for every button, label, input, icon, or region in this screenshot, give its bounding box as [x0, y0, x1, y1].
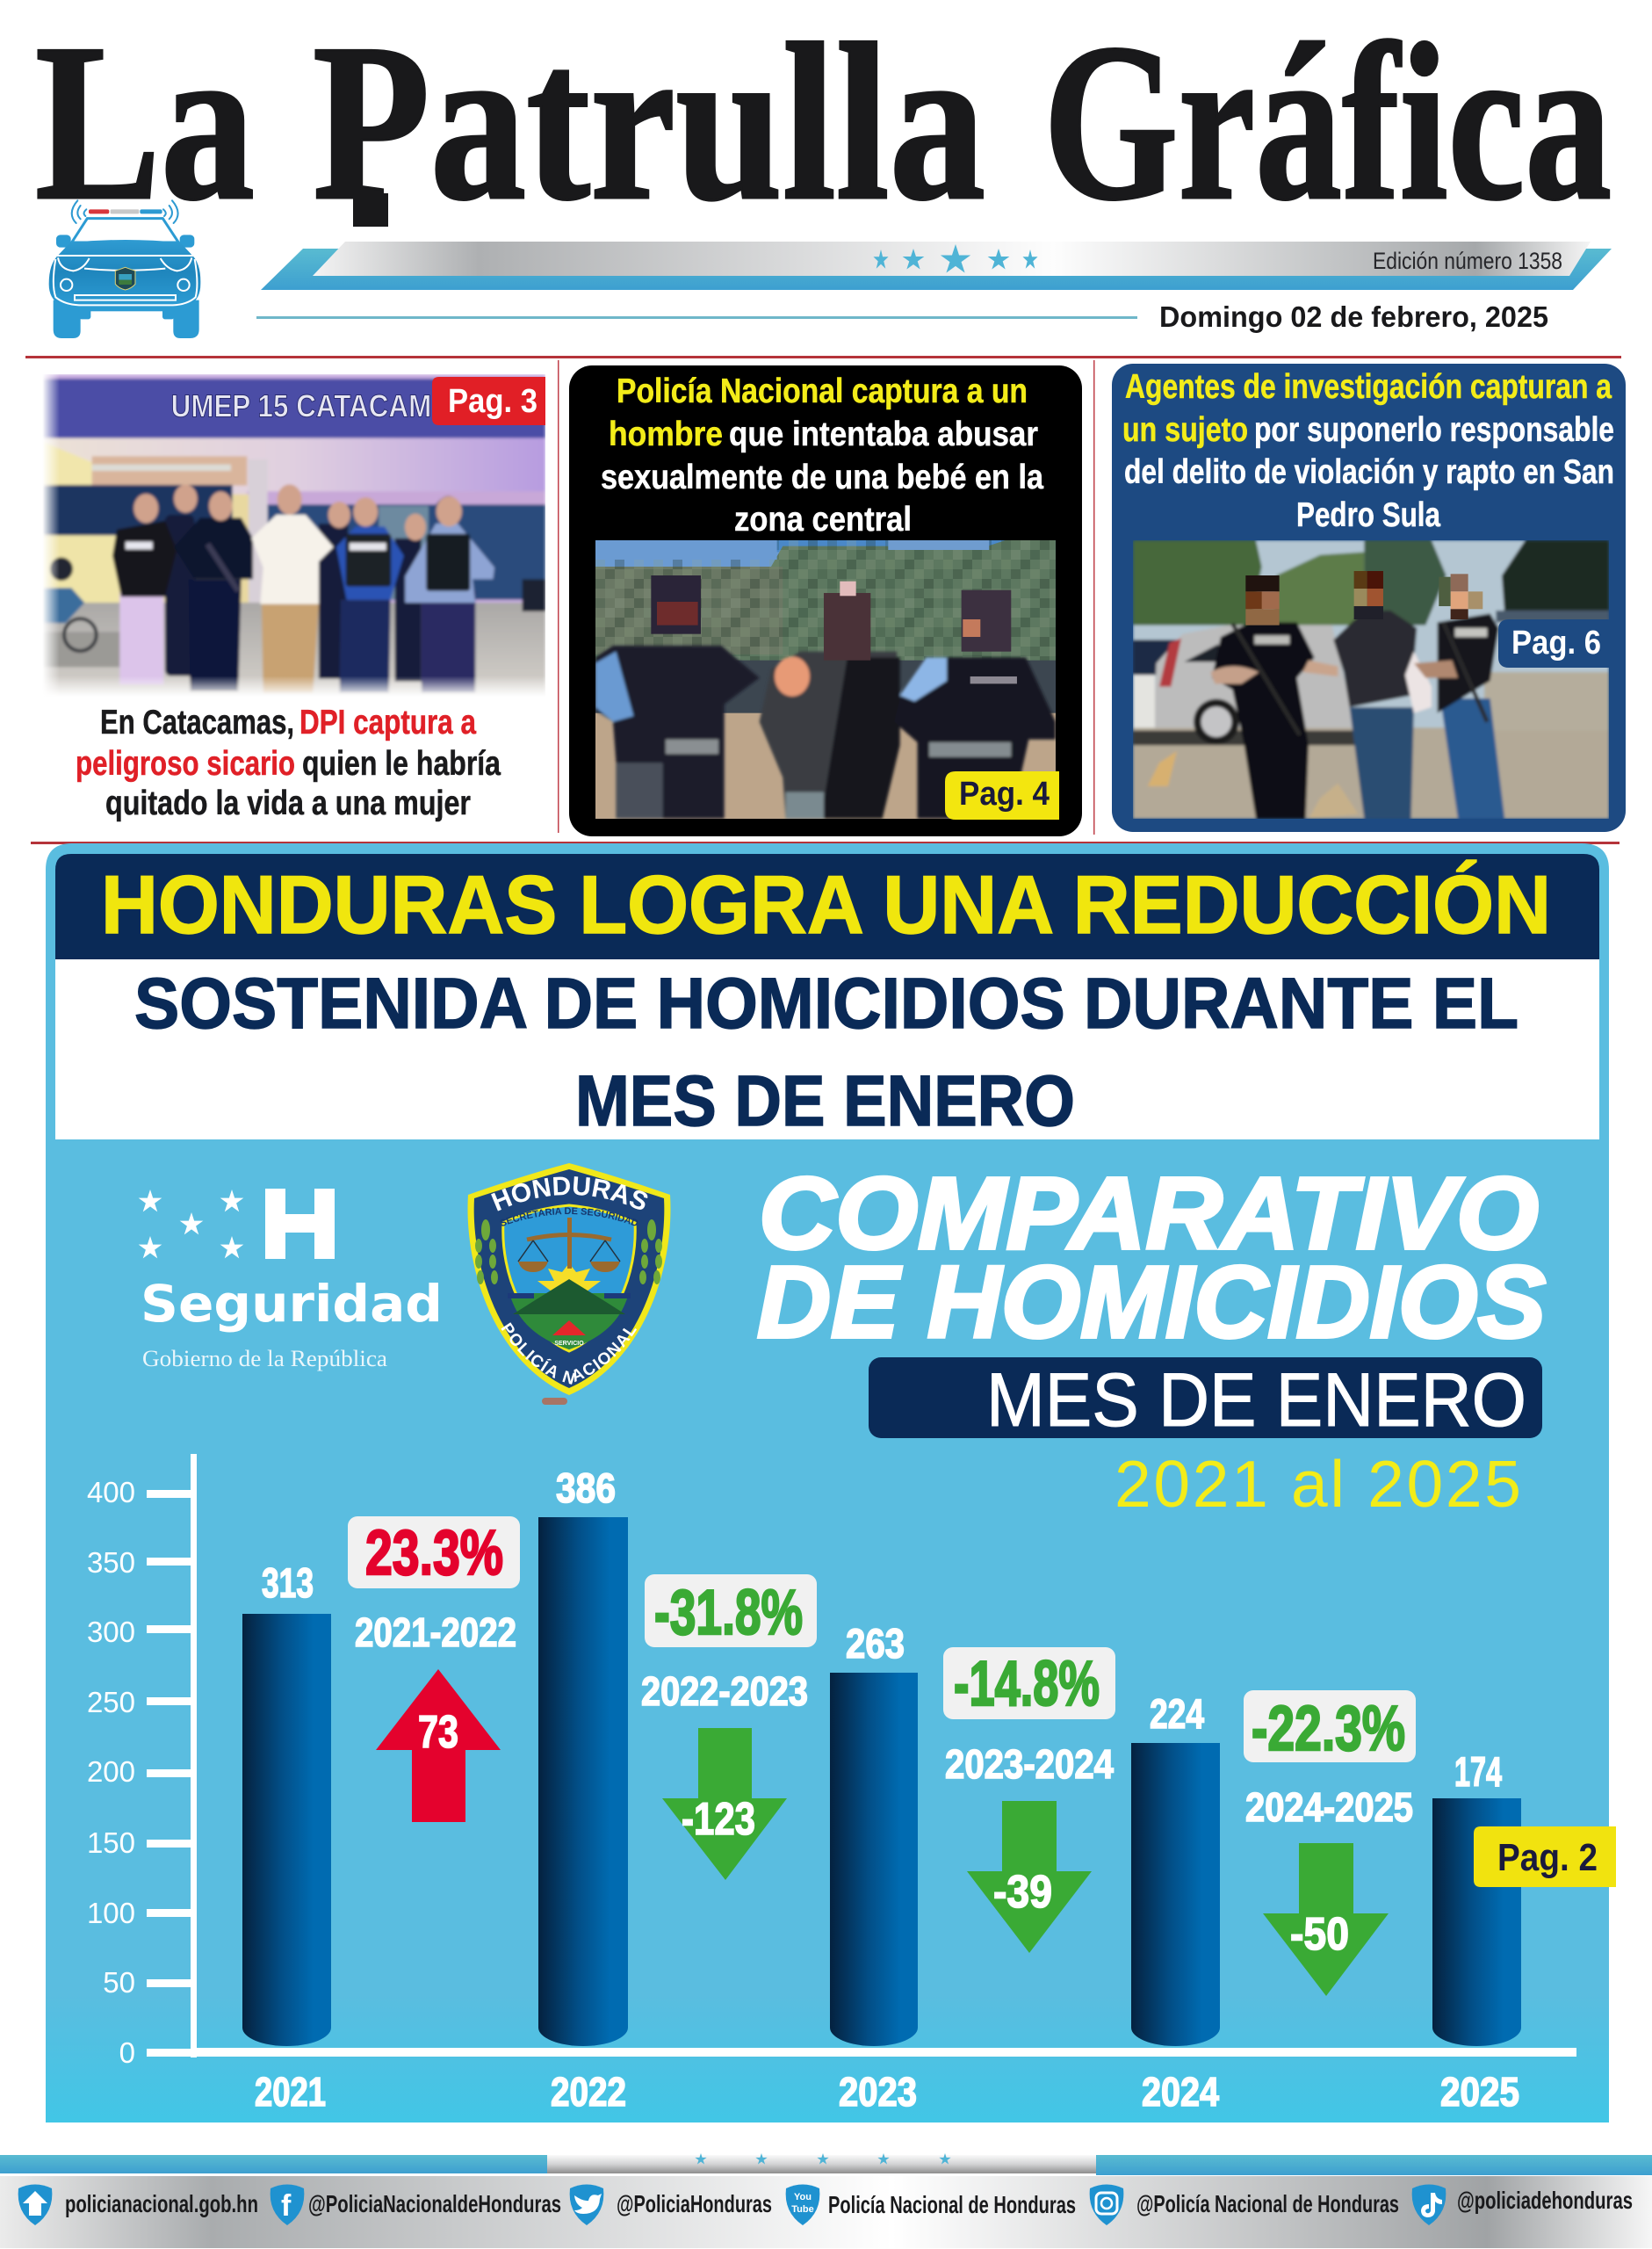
badge: Pag. 3: Pag. 3 [448, 383, 537, 420]
chart: homicides per year [87, 1454, 1576, 2115]
bar 2023 [830, 1620, 918, 2115]
bar 2021: 313 [262, 1559, 314, 1606]
title: comparativo: DE HOMICIDIOS [757, 1245, 1546, 1359]
headline: Pedro Sula [1296, 496, 1440, 534]
title: comparativo: COMPARATIVO [759, 1156, 1539, 1270]
masthead title: Patrulla [313, 0, 985, 247]
photo: pixelated detainee [595, 540, 1056, 819]
panel: San Pedro Sula story [1112, 364, 1626, 832]
arrow down [967, 1801, 1092, 1953]
change 2023-2024 [943, 1647, 1115, 1953]
change 2024-2025: -22.3% [1252, 1694, 1405, 1764]
y axis: 0 [119, 2036, 135, 2069]
logo: Policía Nacional badge [467, 1163, 671, 1405]
bar 2023: 263 [846, 1620, 905, 1667]
link: twitter [570, 2184, 772, 2225]
change 2024-2025: 2024-2025 [1245, 1784, 1413, 1830]
link: tiktok [1412, 2184, 1633, 2225]
headline: que intentaba abusar [729, 416, 1038, 453]
arrow up: 73 [418, 1707, 458, 1758]
link: website: policianacional.gob.hn [65, 2190, 258, 2217]
label: mes de enero: MES DE ENERO [986, 1358, 1526, 1443]
y axis: 350 [87, 1546, 135, 1579]
bar 2021: 2021 [255, 2069, 326, 2115]
footer ribbon [0, 2153, 1652, 2175]
headline: hombre [609, 416, 723, 453]
link: youtube: Policía Nacional de Honduras [828, 2191, 1076, 2218]
bar 2021 [242, 1559, 331, 2115]
change 2022-2023: 2022-2023 [641, 1668, 808, 1714]
y axis: 200 [87, 1755, 135, 1788]
y axis: 50 [103, 1966, 135, 1999]
caption: En Catacamas, [100, 704, 294, 741]
link: facebook: f [281, 2189, 292, 2223]
arrow up [376, 1669, 501, 1822]
badge: Pag. 6: Pag. 6 [1511, 625, 1601, 662]
bar 2022: 386 [556, 1464, 616, 1511]
caption [76, 704, 501, 822]
date line [256, 300, 1548, 333]
change 2024-2025 [1244, 1690, 1416, 1996]
badge: Pag. 2: Pag. 2 [1497, 1836, 1598, 1879]
link: youtube: You [794, 2192, 812, 2202]
badge: Pag. 6 [1498, 619, 1609, 668]
link: website [18, 2184, 258, 2225]
arrow down: -39 [993, 1867, 1052, 1918]
bar 2023: 2023 [839, 2069, 917, 2115]
link: youtube [786, 2184, 1076, 2225]
arrow down [1263, 1843, 1389, 1996]
change 2022-2023 [641, 1574, 817, 1880]
masthead title: La [35, 0, 255, 247]
subheading [55, 959, 1599, 1141]
change 2021-2022 [348, 1516, 520, 1822]
logo: Seguridad [139, 1189, 443, 1371]
footer: social links [0, 2176, 1652, 2248]
heading band: HONDURAS LOGRA UNA REDUCCIÓN [101, 858, 1551, 951]
masthead title [35, 0, 1612, 247]
link: instagram: @Policía Nacional de Honduras [1136, 2190, 1399, 2217]
y axis: 250 [87, 1686, 135, 1718]
headline: un sujeto [1122, 411, 1248, 449]
y axis [87, 1454, 1576, 2069]
title: comparativo [757, 1156, 1546, 1359]
change 2021-2022: 2021-2022 [355, 1609, 516, 1655]
bar 2025 [1432, 1748, 1521, 2115]
link: facebook [271, 2184, 561, 2225]
y axis: 400 [87, 1476, 135, 1508]
logo: Policía Nacional badge: HONDURAS [491, 1176, 648, 1211]
logo: Policía Nacional badge: POLICÍA NACIONAL [501, 1322, 637, 1385]
icon: police car [49, 200, 200, 338]
change 2021-2022: 23.3% [365, 1518, 503, 1588]
panel: zona central story [569, 365, 1082, 836]
caption: DPI captura a [299, 704, 476, 741]
link: youtube: Tube [791, 2204, 814, 2215]
change 2022-2023: -31.8% [654, 1578, 803, 1648]
badge: Pag. 2 [1474, 1826, 1616, 1887]
label: year range: 2021 al 2025 [1115, 1447, 1521, 1521]
badge: Pag. 4: Pag. 4 [959, 776, 1050, 813]
badge: Pag. 4 [945, 771, 1059, 820]
caption: peligroso sicario [76, 745, 295, 783]
photo: arrest at UMEP 15 [42, 374, 545, 697]
photo: arrest at UMEP 15: UMEP 15 CATACAM [171, 388, 431, 424]
headline: sexualmente de una bebé en la [601, 459, 1043, 496]
link: twitter: @PoliciaHonduras [617, 2190, 772, 2217]
change 2023-2024: 2023-2024 [945, 1741, 1114, 1787]
caption: quitado la vida a una mujer [105, 785, 471, 822]
arrow down: -123 [682, 1794, 755, 1845]
caption: quien le habría [302, 745, 501, 783]
bar 2024: 2024 [1142, 2069, 1219, 2115]
subheading: MES DE ENERO [575, 1061, 1075, 1141]
link: facebook: @PoliciaNacionaldeHonduras [308, 2190, 561, 2217]
headline: zona central [734, 501, 912, 539]
arrow down [662, 1728, 787, 1880]
change 2023-2024: -14.8% [954, 1649, 1100, 1719]
bar 2022 [538, 1464, 628, 2115]
panel: Catacamas story [42, 374, 545, 822]
headline [1122, 368, 1614, 534]
subheading: SOSTENIDA DE HOMICIDIOS DURANTE EL [134, 964, 1519, 1044]
date line: Domingo 02 de febrero, 2025 [1159, 300, 1548, 333]
bar 2024: 224 [1150, 1690, 1204, 1737]
headline [601, 372, 1043, 539]
y axis: 300 [87, 1616, 135, 1648]
logo: Seguridad: Seguridad [141, 1274, 443, 1334]
logo: Policía Nacional badge: SERVICIO [554, 1341, 584, 1347]
badge: Pag. 3 [432, 377, 545, 425]
y axis: 100 [87, 1897, 135, 1929]
photo: detainee and agents [1133, 540, 1609, 819]
edition banner: Edición número 1358 [1373, 248, 1562, 274]
bar 2025: 2025 [1440, 2069, 1519, 2115]
edition banner [261, 242, 1612, 290]
arrow down: -50 [1290, 1909, 1349, 1960]
y axis: 150 [87, 1826, 135, 1859]
bar 2024 [1131, 1690, 1220, 2115]
panel: main infographic [46, 843, 1616, 2122]
bar 2025: 174 [1454, 1748, 1502, 1795]
logo: Policía Nacional badge: SECRETARIA DE SEGURIDAD [501, 1207, 638, 1226]
bar 2022: 2022 [551, 2069, 626, 2115]
headline: Policía Nacional captura a un [617, 372, 1028, 410]
logo: Seguridad: Gobierno de la República [142, 1346, 387, 1371]
link: instagram [1090, 2184, 1399, 2225]
